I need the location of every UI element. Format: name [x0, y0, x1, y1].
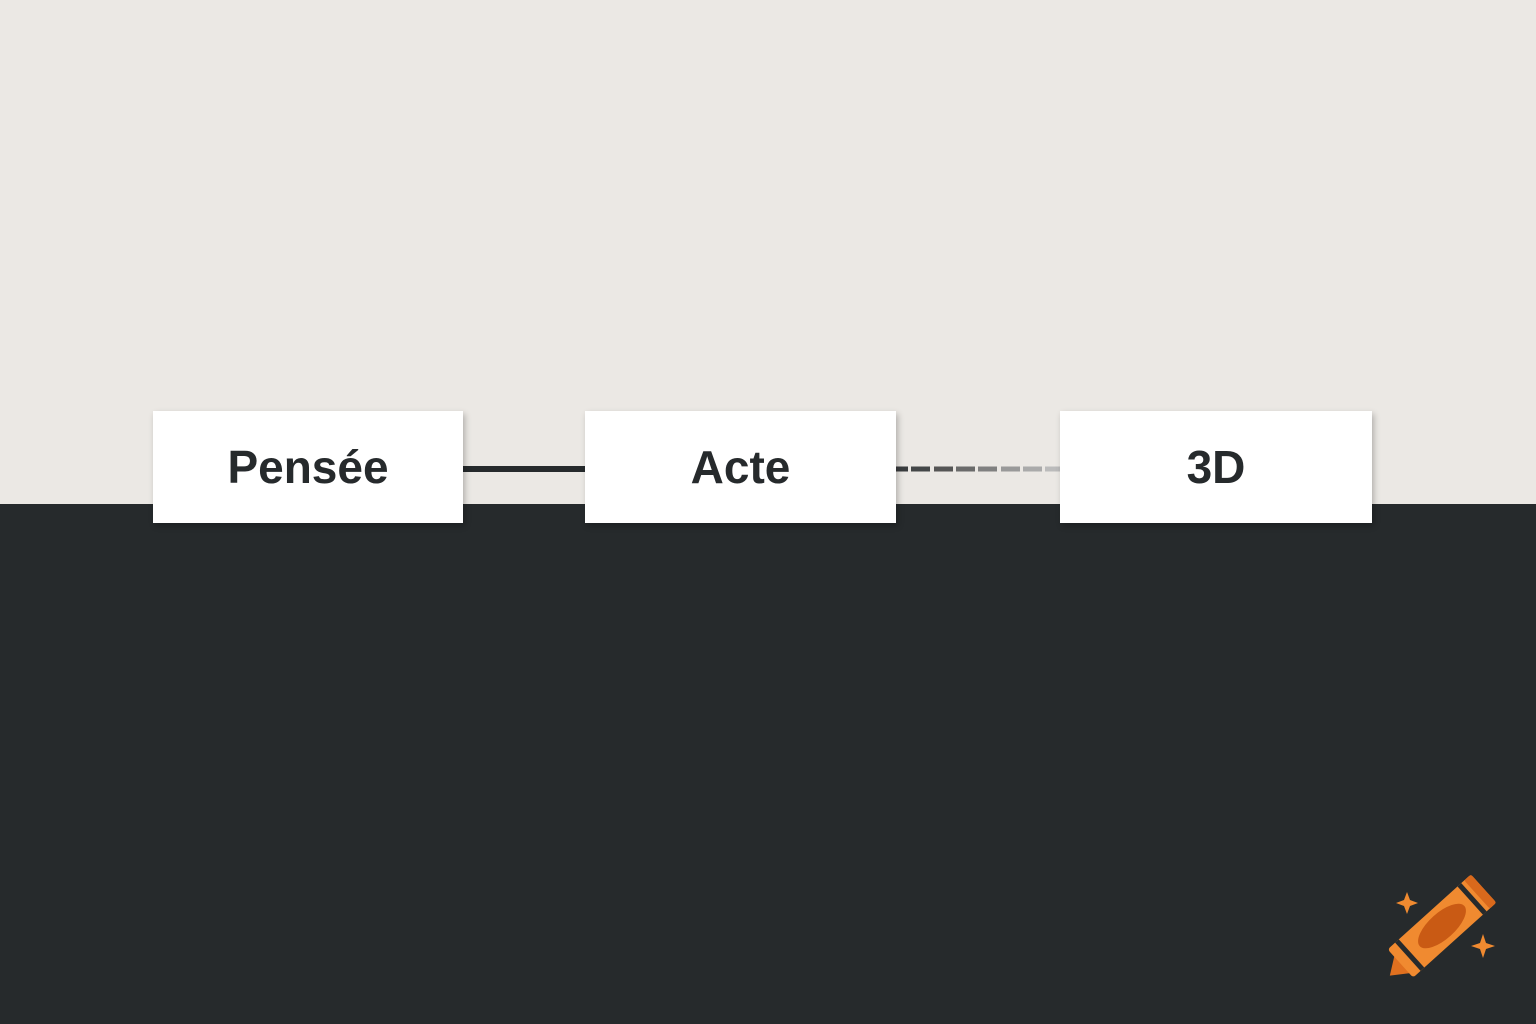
box: Acte: [585, 411, 896, 523]
icon: crayon: [1388, 875, 1496, 976]
box: Pensée: Pensée: [227, 441, 389, 493]
connector: fading dashed line: [896, 466, 1060, 472]
box: Pensée: [153, 411, 463, 523]
box: 3D: [1060, 411, 1372, 523]
box: 3D: 3D: [1187, 441, 1245, 493]
box: Acte: Acte: [691, 441, 790, 493]
connector: solid line: [463, 466, 585, 472]
